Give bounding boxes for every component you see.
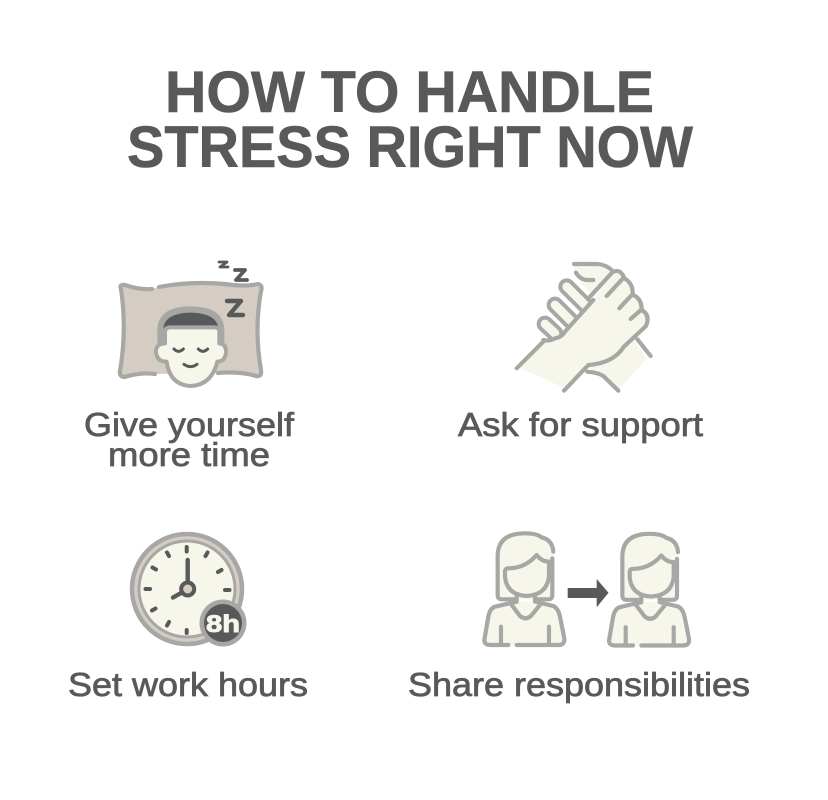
left fist fingers bbox=[545, 287, 587, 333]
title: HOW TO HANDLE bbox=[165, 60, 654, 125]
label: give yourself more time: Give yourself bbox=[84, 406, 295, 443]
icon: sleeping head on pillow bbox=[120, 262, 262, 386]
label: share responsibilities: Share responsibilities bbox=[408, 666, 750, 703]
label: give yourself more time: more time bbox=[108, 436, 270, 473]
icon: clasped hands bbox=[517, 264, 651, 391]
icon: person one bbox=[484, 533, 564, 645]
icon: arrow bbox=[568, 579, 608, 607]
icon: clock with 8h badge bbox=[132, 534, 246, 646]
icon: person two bbox=[609, 534, 689, 645]
sleep letters bbox=[219, 262, 247, 315]
badge: 8h bbox=[206, 611, 240, 638]
label: ask for support: Ask for support bbox=[458, 406, 703, 443]
clock ticks bbox=[146, 547, 230, 633]
label: set work hours: Set work hours bbox=[68, 666, 308, 703]
title bbox=[127, 60, 693, 180]
label: give yourself more time bbox=[84, 406, 295, 473]
pillow bbox=[120, 283, 262, 377]
clock hands bbox=[173, 560, 194, 598]
head bbox=[156, 308, 226, 386]
title: STRESS RIGHT NOW bbox=[127, 115, 693, 180]
thumb bbox=[574, 264, 613, 293]
right hand bbox=[545, 271, 648, 367]
